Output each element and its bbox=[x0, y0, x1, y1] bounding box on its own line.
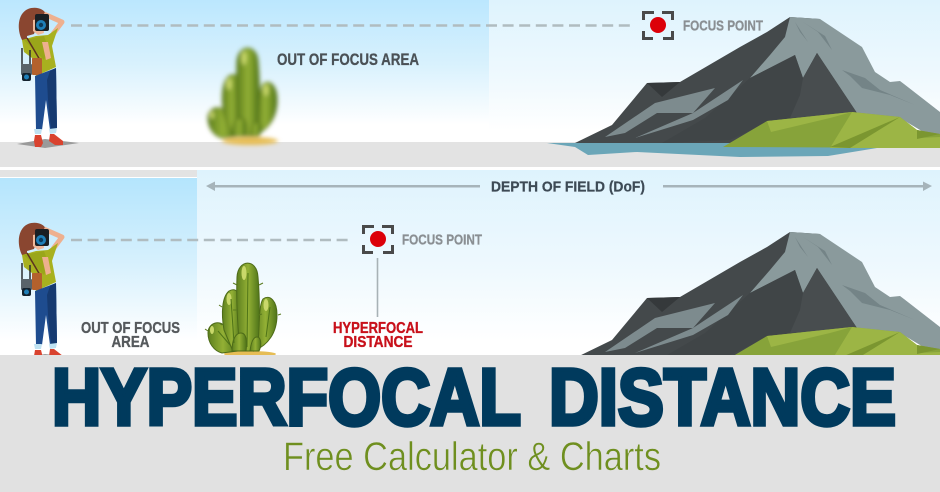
icon: focus point bbox=[362, 225, 394, 254]
sky: in focus zone bbox=[489, 0, 940, 142]
icon: focus point bbox=[642, 11, 674, 40]
title: DISTANCE bbox=[549, 352, 896, 442]
panel: top scene bbox=[0, 0, 940, 167]
arrow: depth of field left bbox=[206, 182, 480, 191]
sky: out of focus zone bbox=[0, 178, 197, 355]
photographer bbox=[17, 8, 79, 148]
icon: sharp cactus bbox=[205, 263, 281, 357]
arrow: depth of field right bbox=[663, 182, 932, 191]
label: focus point: FOCUS POINT bbox=[402, 232, 482, 248]
sky: depth of field zone bbox=[197, 170, 940, 355]
ground bbox=[0, 142, 940, 167]
panel: bottom scene bbox=[0, 170, 940, 363]
mountain bbox=[575, 17, 940, 148]
label: depth of field: DEPTH OF FIELD (DoF) bbox=[491, 179, 645, 196]
banner background bbox=[0, 355, 940, 492]
label: hyperfocal distance: HYPERFOCAL bbox=[333, 320, 423, 337]
subtitle: Free Calculator & Charts bbox=[283, 435, 661, 479]
label: out of focus area: OUT OF FOCUS AREA bbox=[277, 51, 419, 69]
title: HYPERFOCAL bbox=[52, 352, 521, 442]
grey strip bbox=[0, 170, 197, 177]
label: hyperfocal distance: DISTANCE bbox=[344, 334, 413, 351]
focus line bbox=[71, 24, 630, 27]
photographer bbox=[17, 223, 79, 363]
connector to hyperfocal label bbox=[376, 258, 378, 317]
label: focus point: FOCUS POINT bbox=[683, 18, 763, 34]
banner bbox=[0, 352, 940, 492]
label: out of focus area: AREA bbox=[112, 334, 150, 351]
icon: blurred cactus bbox=[208, 48, 278, 145]
mountain bbox=[575, 232, 940, 363]
focus line bbox=[71, 239, 352, 241]
sky: out of focus zone bbox=[0, 0, 490, 142]
label: out of focus area: OUT OF FOCUS bbox=[81, 320, 180, 337]
water bbox=[547, 143, 877, 157]
